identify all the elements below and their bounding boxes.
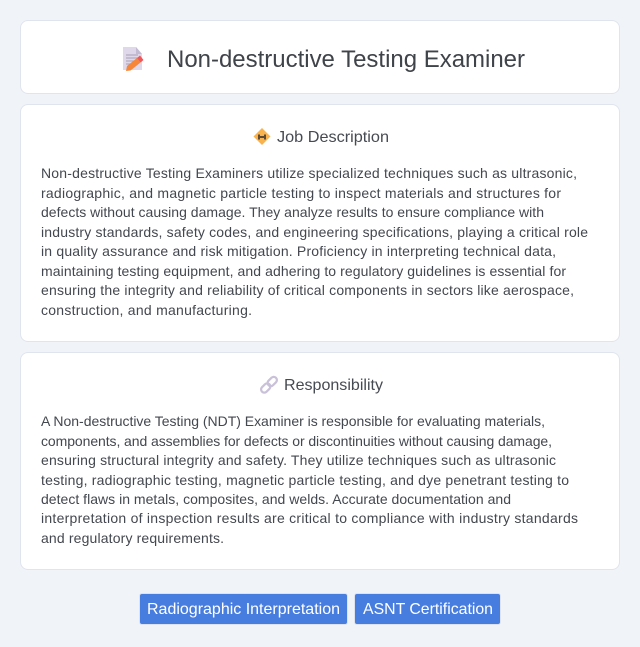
title: Non-destructive Testing Examiner [167,46,525,73]
tag button: Radiographic Interpretation [140,594,347,624]
text block: responsibility: components, and assemblies for defects or discontinuities without causing damage, [41,433,552,449]
text block: job description: defects without causing damage. They analyze results to ensure compliance with [41,204,544,220]
text block: responsibility: testing, radiographic testing, magnetic particle testing, and dye penetrant testing to [41,472,569,488]
text block: responsibility: and regulatory requirements. [41,530,224,546]
text block: responsibility: interpretation of inspection results are critical to compliance with industry standards [41,510,578,526]
text block: job description: construction, and manufacturing. [41,302,252,318]
panel: job description card [20,104,620,342]
tag label: ASNT Certification: ASNT Certification [363,601,493,618]
panel: title card [20,20,620,94]
text block: job description [41,165,588,318]
heading: Job Description: Job Description [277,129,389,146]
icon: document with pencil [123,47,144,71]
text block: responsibility: ensuring structural integrity and safety. They utilize techniques such as ultrasonic [41,452,556,468]
text block: job description: Non-destructive Testing Examiners utilize specialized techniques such as ultrasonic, [41,165,577,181]
text block: job description: radiographic, and magnetic particle testing to inspect materials and structures for [41,185,561,201]
text block: responsibility [41,413,578,546]
text block: responsibility: detect flaws in metals, composites, and welds. Accurate documentation and [41,491,511,507]
icon: chain link [260,376,278,394]
tag label: Radiographic Interpretation: Radiographic Interpretation [147,601,340,618]
panel: responsibility card [20,352,620,570]
text block: responsibility: A Non-destructive Testing (NDT) Examiner is responsible for evaluating materials, [41,413,545,429]
text block: job description: ensuring the integrity and reliability of critical components in sectors like aerospace, [41,282,574,298]
heading: Responsibility: Responsibility [284,377,383,394]
text block: job description: maintaining testing equipment, and adhering to regulatory guidelines is essential for [41,263,566,279]
text block: job description: industry standards, safety codes, and engineering specifications, playing a critical role [41,224,588,240]
tag button: ASNT Certification [355,594,500,624]
text block: job description: in quality assurance and risk mitigation. Proficiency in interpreting technical data, [41,243,556,259]
icon: orange diamond [254,128,270,145]
